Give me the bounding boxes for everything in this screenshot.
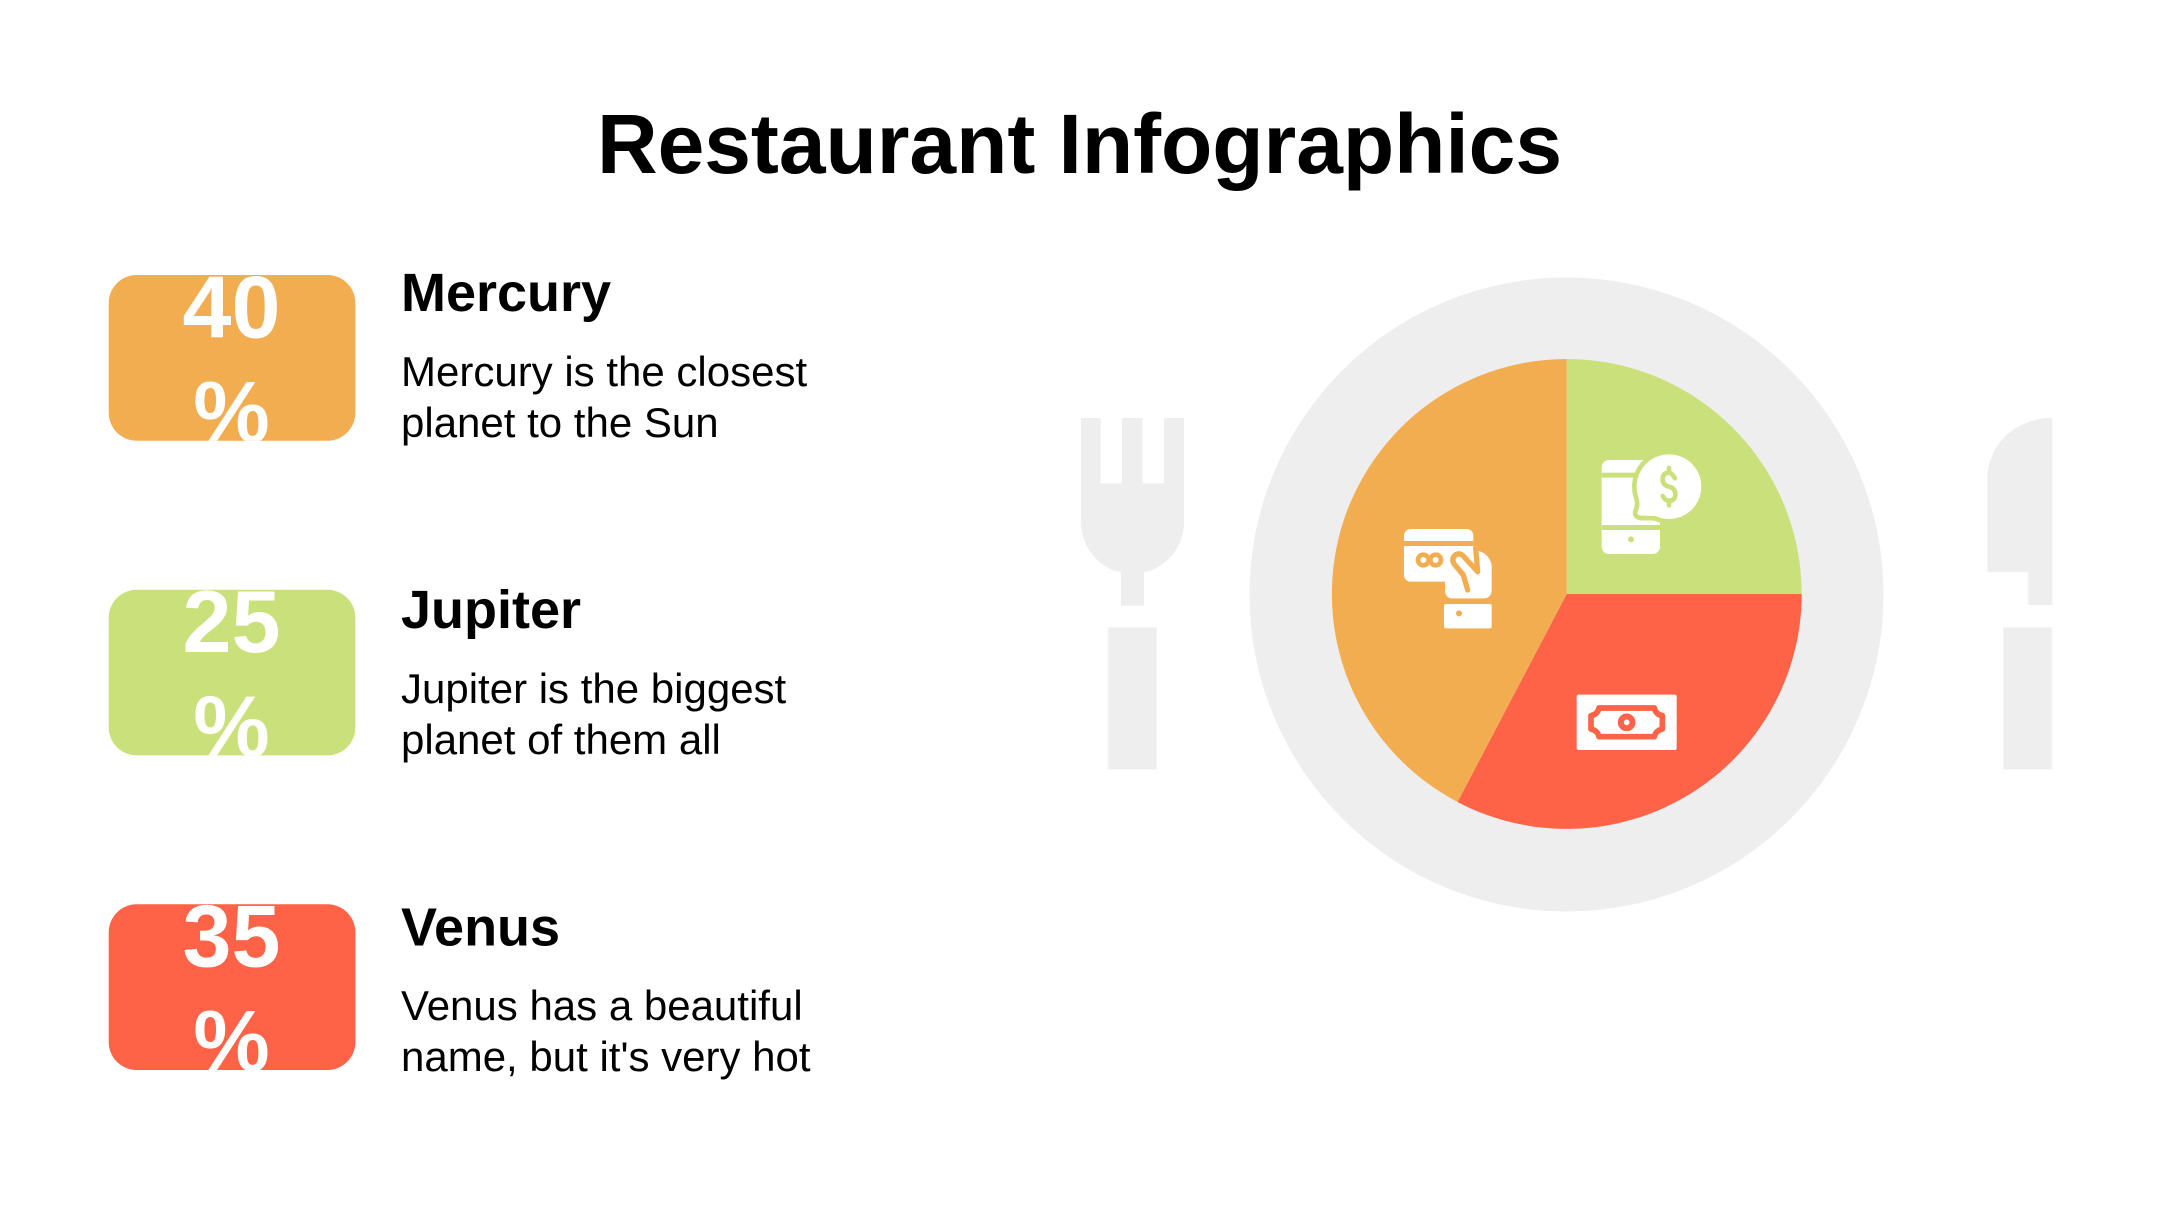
badge: Jupiter 25%: 25 [183,572,280,671]
badge: Venus 35%: % [193,994,270,1090]
heading: Mercury: Mercury [401,263,611,323]
plate [1250,278,1884,912]
icon: fork [1081,418,1184,769]
badge: Mercury 40% [108,275,356,441]
badge: Mercury 40%: 40 [183,258,280,357]
badge: Venus 35%: 35 [183,887,280,986]
text: Jupiter description: planet of them all [401,716,721,763]
icon: banknote [1577,695,1677,750]
text: Mercury description: Mercury is the closest [401,348,807,395]
badge: Venus 35% [108,904,356,1070]
panel: Venus row [108,904,810,1080]
title: Restaurant Infographics [597,97,1562,191]
badge: Mercury 40%: % [193,365,270,461]
pie slice: orange 40% [1332,359,1567,802]
text: Mercury description: planet to the Sun [401,399,719,446]
pie slice: green 25% [1567,359,1802,594]
text: Venus description: name, but it's very hot [401,1033,811,1080]
pie slice: red 35% [1458,594,1802,829]
text: Venus description: Venus has a beautiful [401,982,803,1029]
icon: knife [1987,418,2052,769]
badge: Jupiter 25%: % [193,680,270,776]
text: Jupiter description: Jupiter is the biggest [401,665,787,712]
heading: Venus: Venus [401,898,560,958]
panel: Mercury row [108,274,807,446]
panel: Jupiter row [108,589,786,762]
icon: phone with dollar speech bubble [1602,450,1706,554]
heading: Jupiter: Jupiter [401,580,581,640]
badge: Jupiter 25% [108,590,356,756]
icon: hand holding credit card [1404,529,1492,628]
pie chart [1332,359,1802,829]
